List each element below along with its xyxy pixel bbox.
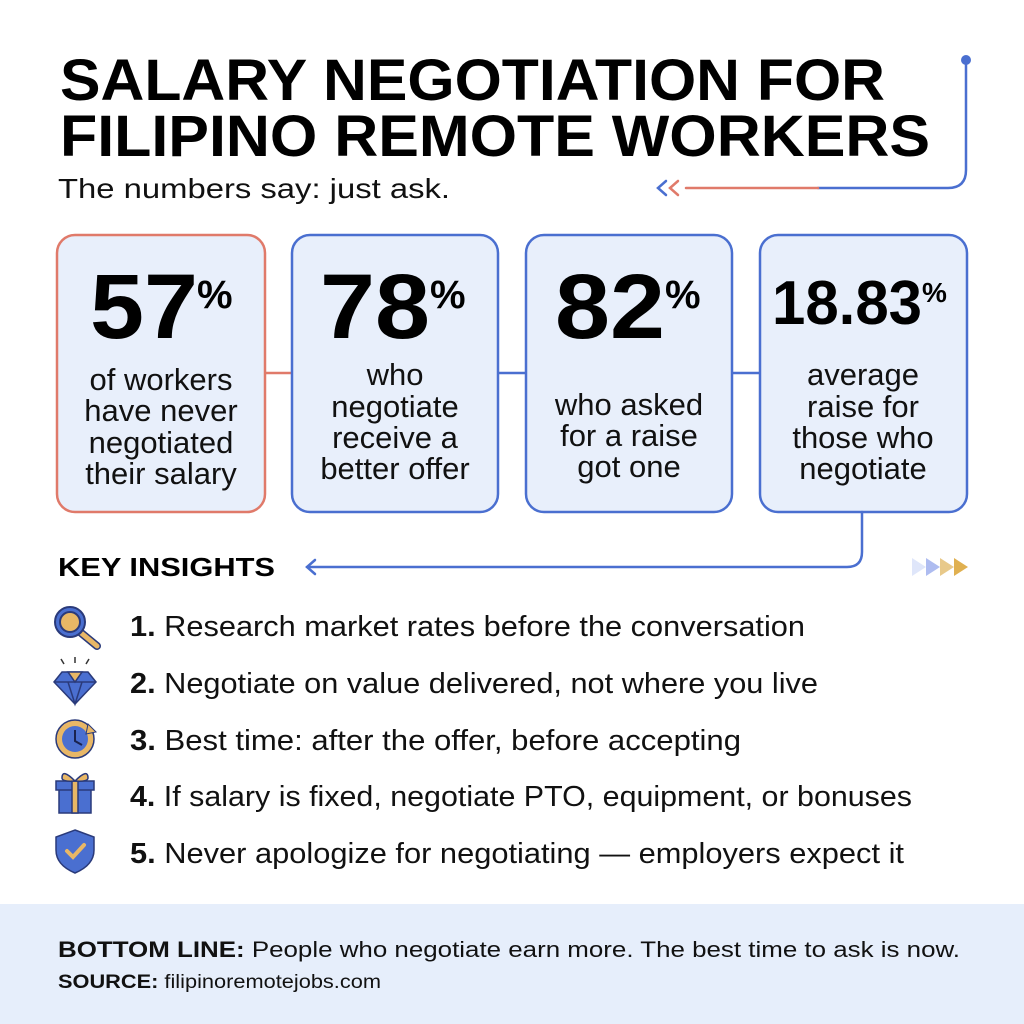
card 3: 82%: who asked — [554, 387, 703, 422]
insights list: 5. Never apologize for negotiating — employers expect it — [130, 838, 904, 870]
card 2: 78%: who — [366, 357, 423, 392]
card 1: 57% — [57, 235, 265, 512]
subtitle: The numbers say: just ask. — [58, 173, 450, 204]
card 3: 82%: 82 — [555, 256, 665, 358]
card 4: 18.83%: those who — [792, 420, 934, 455]
card 4: 18.83%: average — [807, 357, 919, 392]
icon: magnifier — [55, 607, 97, 646]
title — [60, 48, 930, 169]
icon: chevrons — [912, 558, 968, 576]
icon: shield — [56, 830, 94, 873]
insights list: 4. If salary is fixed, negotiate PTO, equipment, or bonuses — [130, 781, 912, 813]
card 3: 82% — [526, 235, 732, 512]
insights list — [130, 611, 912, 870]
card 2: 78%: 78 — [320, 256, 430, 358]
icon: clock — [56, 720, 96, 758]
card 2: 78%: % — [430, 273, 466, 317]
arrow: header connector — [658, 55, 971, 195]
title: FILIPINO REMOTE WORKERS — [60, 104, 930, 169]
card 2: 78%: negotiate — [331, 389, 459, 424]
card 3: 82%: got one — [577, 449, 681, 484]
card 4: 18.83%: raise for — [807, 389, 919, 424]
icon: diamond — [54, 657, 96, 704]
insights list: 2. Negotiate on value delivered, not where you live — [130, 668, 818, 700]
card 2: 78% — [292, 235, 498, 512]
card 4: 18.83%: % — [922, 277, 947, 308]
footer band — [0, 904, 1024, 1024]
card 4: 18.83%: negotiate — [799, 451, 927, 486]
card 3: 82%: for a raise — [560, 418, 698, 453]
card 4: 18.83% — [760, 235, 967, 512]
card 4: 18.83%: 18.83 — [772, 269, 922, 338]
footer band: SOURCE: filipinoremotejobs.com — [58, 972, 381, 993]
card 1: 57%: negotiated — [89, 425, 233, 460]
title: SALARY NEGOTIATION FOR — [60, 48, 885, 113]
card 2: 78%: receive a — [332, 420, 459, 455]
card 1: 57%: have never — [84, 393, 238, 428]
card 1: 57%: of workers — [90, 362, 232, 397]
footer band: BOTTOM LINE: People who negotiate earn more. The best time to ask is now. — [58, 937, 960, 962]
card 1: 57%: 57 — [90, 256, 198, 358]
card 3: 82%: % — [665, 273, 701, 317]
insights list: 3. Best time: after the offer, before accepting — [130, 725, 741, 757]
card connectors — [265, 372, 760, 374]
heading: key insights: KEY INSIGHTS — [58, 552, 275, 582]
card 1: 57%: their salary — [85, 456, 237, 491]
insights list: 1. Research market rates before the conversation — [130, 611, 805, 643]
arrow: to key insights — [307, 512, 862, 574]
card 2: 78%: better offer — [320, 451, 470, 486]
card 1: 57%: % — [197, 273, 233, 317]
icon: gift — [56, 774, 94, 813]
